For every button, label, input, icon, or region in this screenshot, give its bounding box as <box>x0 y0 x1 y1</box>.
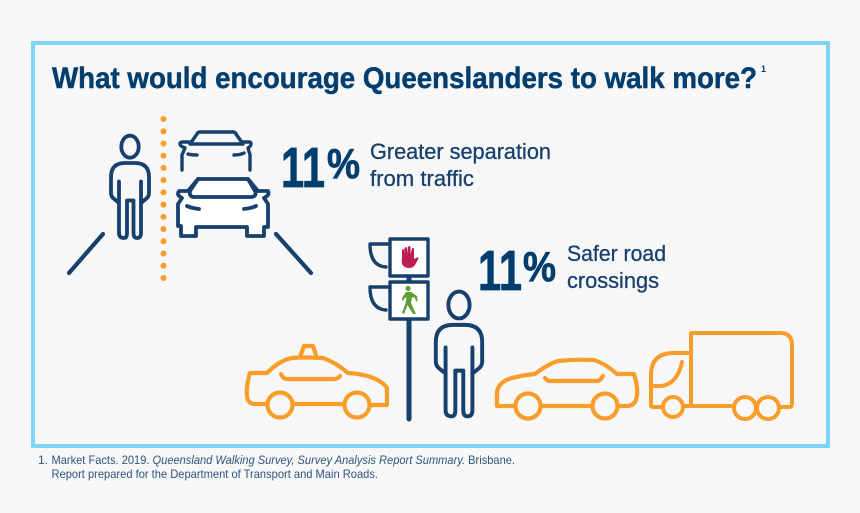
label: greater separation from traffic: Greater separation <box>370 139 551 164</box>
label: safer road crossings <box>567 241 666 293</box>
icon: traffic light <box>370 239 428 419</box>
signal hood bottom <box>370 287 390 310</box>
label: greater separation from traffic <box>370 139 551 191</box>
icon: road with person and cars <box>69 119 311 278</box>
pole <box>406 276 412 419</box>
panel: light blue frame <box>33 43 828 446</box>
icon: green walking figure <box>402 286 418 314</box>
stat: 11% greater separation: 11 <box>281 136 325 200</box>
orange dotted centre line <box>160 119 166 278</box>
footnote: Report prepared for the Department of Transport and Main Roads. <box>52 467 378 481</box>
label: greater separation from traffic: from traffic <box>370 166 474 191</box>
stat: 11% safer road crossings: % <box>523 243 556 290</box>
stat: 11% safer road crossings: 11 <box>478 239 522 303</box>
icon: front car <box>178 179 268 236</box>
road edge right <box>276 234 311 273</box>
label: safer road crossings: crossings <box>567 268 659 293</box>
red hand box <box>390 239 428 276</box>
footnote: 1. <box>38 453 48 467</box>
icon: orange truck <box>651 333 792 419</box>
stat: 11% greater separation: % <box>327 140 360 187</box>
label: safer road crossings: Safer road <box>567 241 666 266</box>
footnote <box>38 453 515 481</box>
icon: person at crossing <box>436 292 482 416</box>
icon: orange car <box>497 360 637 418</box>
road edge left <box>69 234 103 273</box>
icon: back car <box>180 132 251 170</box>
icon: red hand <box>402 246 419 268</box>
icon: orange taxi <box>247 346 387 418</box>
title: 1 <box>761 64 766 74</box>
footnote: Market Facts. 2019. Queensland Walking Survey, Survey Analysis Report Summary. Brisbane. <box>52 453 515 467</box>
signal hood top <box>370 244 390 267</box>
icon: person <box>111 136 149 238</box>
title: What would encourage Queenslanders to walk more? <box>52 62 757 95</box>
walk box <box>390 282 428 319</box>
